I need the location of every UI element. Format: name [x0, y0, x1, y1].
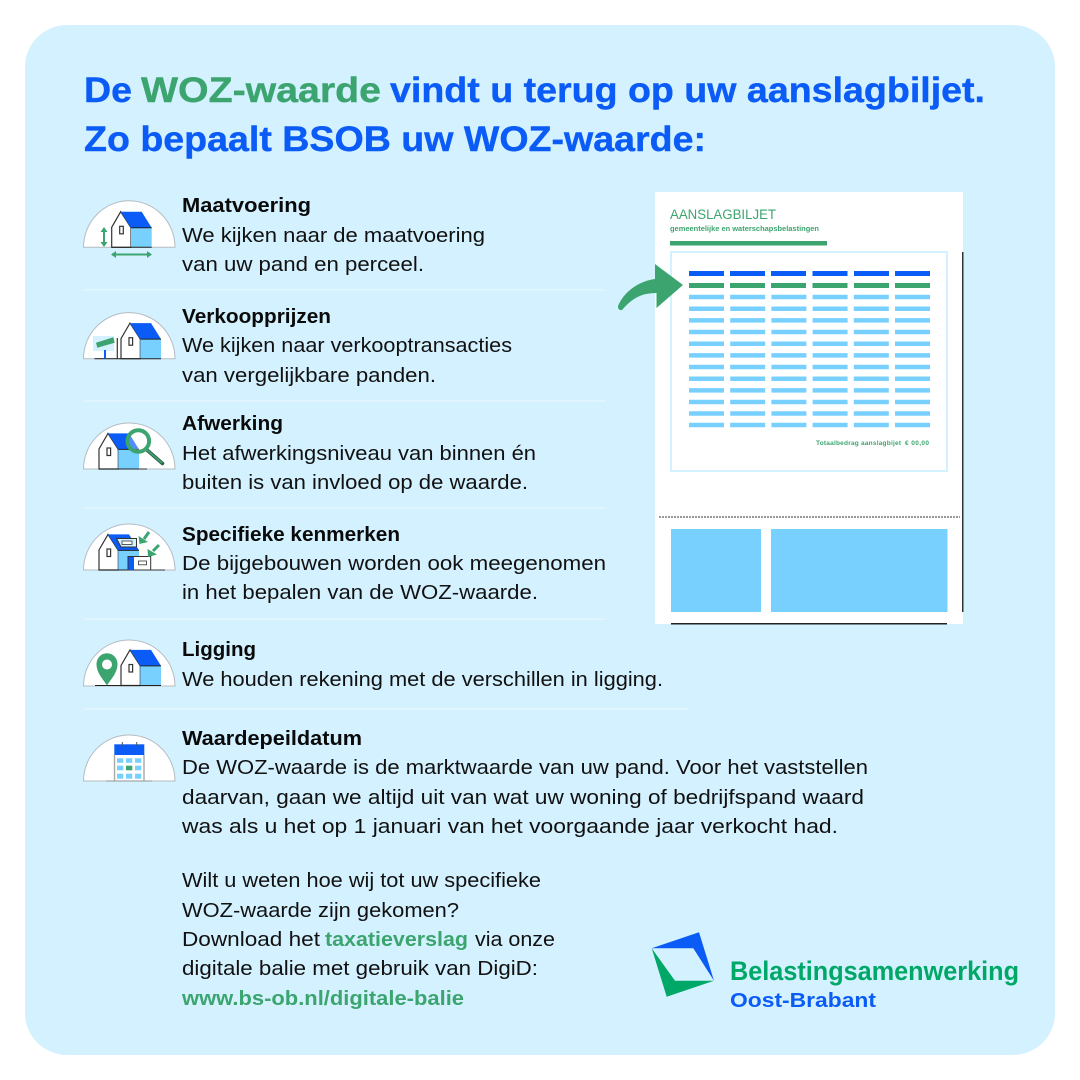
text block: van vergelijkbare panden.: [182, 364, 436, 387]
heading: Waardepeildatum: [182, 727, 362, 750]
title: vindt u terug op uw aanslagbiljet.: [390, 71, 985, 110]
document subheading: gemeentelijke en waterschapsbelastingen: [670, 224, 819, 233]
icon: house with magnifier: [84, 423, 175, 469]
heading: Specifieke kenmerken: [182, 523, 400, 546]
document heading: AANSLAGBILJET: [670, 207, 776, 222]
text block: [182, 552, 606, 604]
text block: We kijken naar verkooptransacties: [182, 334, 512, 357]
item: Verkoopprijzen: [84, 305, 512, 387]
payment slip blocks: [671, 529, 948, 612]
text block: call to action: digitale balie met gebruik van DigiD:: [182, 957, 538, 980]
icon: house with sale sign: [84, 313, 175, 359]
text block: We houden rekening met de verschillen in ligging.: [182, 668, 663, 691]
item: Specifieke kenmerken: [84, 523, 606, 604]
text block: Het afwerkingsniveau van binnen én: [182, 442, 536, 465]
heading: Maatvoering: [182, 194, 311, 217]
item: Afwerking: [84, 412, 536, 494]
table rows: [689, 271, 930, 425]
heading: Verkoopprijzen: [182, 305, 331, 328]
heading: Ligging: [182, 638, 256, 661]
item: Maatvoering: [84, 194, 485, 276]
text block: [182, 224, 485, 276]
text block: was als u het op 1 januari van het voorgaande jaar verkocht had.: [181, 815, 838, 838]
table total: Totaalbedrag aanslagbijet: [816, 440, 902, 447]
text block: call to action: WOZ-waarde zijn gekomen?: [182, 899, 459, 922]
logo: Oost-Brabant: [730, 989, 876, 1012]
icon: house with dimension arrows: [84, 201, 175, 258]
title: Zo bepaalt BSOB uw WOZ-waarde:: [84, 120, 706, 159]
text block: [182, 334, 512, 387]
text block: daarvan, gaan we altijd uit van wat uw woning of bedrijfspand waard: [182, 786, 864, 809]
text block: call to action: [181, 869, 555, 1010]
item: Waardepeildatum: [84, 727, 868, 838]
text block: van uw pand en perceel.: [182, 253, 424, 276]
text block: call to action: Download het: [182, 928, 320, 951]
text block: De WOZ-waarde is de marktwaarde van uw pand. Voor het vaststellen: [182, 756, 868, 779]
panel: tax bill document: [655, 192, 964, 624]
text block: call to action: www.bs-ob.nl/digitale-balie: [181, 987, 464, 1010]
text block: in het bepalen van de WOZ-waarde.: [182, 581, 538, 604]
table total: € 00,00: [905, 440, 929, 447]
logo mark: [652, 932, 714, 997]
logo: [652, 932, 1019, 1012]
text block: call to action: Wilt u weten hoe wij tot uw specifieke: [182, 869, 541, 892]
title: De: [84, 71, 132, 110]
title: WOZ-waarde: [141, 71, 381, 110]
text block: call to action: taxatieverslag: [325, 928, 468, 951]
text block: buiten is van invloed op de waarde.: [182, 471, 528, 494]
logo: Belastingsamenwerking: [730, 956, 1019, 986]
text block: [181, 756, 868, 838]
text block: call to action: via onze: [475, 928, 555, 951]
text block: We kijken naar de maatvoering: [182, 224, 485, 247]
title: [84, 71, 985, 159]
item: Ligging: [84, 638, 663, 691]
icon: house with annexes and arrows: [84, 524, 175, 570]
heading: Afwerking: [182, 412, 283, 435]
arrow: [618, 264, 683, 310]
text block: De bijgebouwen worden ook meegenomen: [182, 552, 606, 575]
icon: calendar: [84, 735, 175, 781]
icon: house with location pin: [84, 640, 175, 686]
text block: [182, 442, 536, 494]
